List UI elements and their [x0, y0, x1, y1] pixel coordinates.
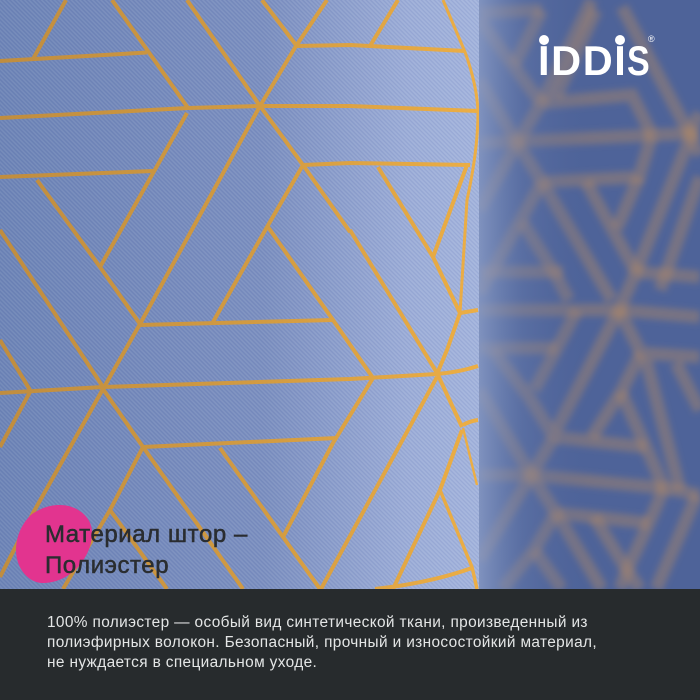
footer panel	[0, 589, 700, 700]
pink blob	[16, 505, 92, 583]
heading: Полиэстер	[45, 552, 169, 579]
description text	[47, 614, 597, 671]
panel: blurred curtain background	[479, 0, 700, 589]
description text: 100% полиэстер — особый вид синтетической ткани, произведенный из	[47, 614, 588, 631]
logo: IDDIS: ®	[648, 34, 655, 44]
blurred pattern	[479, 0, 700, 589]
description text: полиэфирных волокон. Безопасный, прочный и износостойкий материал,	[47, 634, 597, 651]
logo: IDDIS: IDDI	[538, 37, 627, 84]
heading: Материал штор –	[45, 521, 248, 548]
left edge shading	[479, 0, 560, 589]
heading	[45, 521, 248, 579]
description text: не нуждается в специальном уходе.	[47, 654, 317, 671]
gold geometric pattern	[0, 0, 478, 589]
logo: IDDIS: S	[627, 37, 651, 84]
panel: curtain fabric	[0, 0, 479, 589]
